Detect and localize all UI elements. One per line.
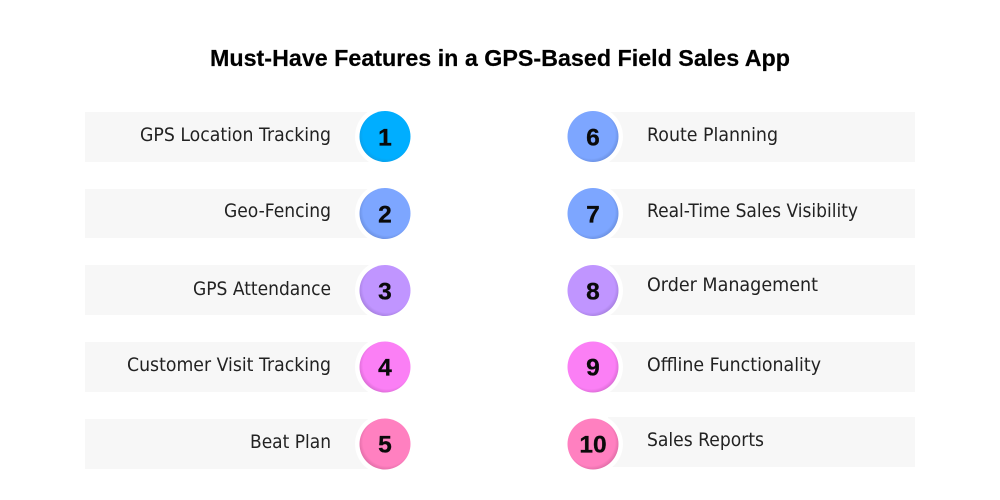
feature 10: Sales Reports: Sales Reports [647,429,764,451]
feature 2: Geo-Fencing: 2 [378,202,392,228]
feature 8: Order Management [563,260,915,320]
feature 2: Geo-Fencing: Geo-Fencing [224,200,331,222]
feature 2: Geo-Fencing [85,184,415,244]
feature 7: Real-Time Sales Visibility: Real-Time Sales Visibility [647,200,858,222]
feature 1: GPS Location Tracking [85,106,415,166]
feature 4: Customer Visit Tracking: 4 [378,354,392,382]
feature 8: Order Management: 8 [586,278,600,306]
feature 3: GPS Attendance: GPS Attendance [193,278,331,300]
feature 10: Sales Reports: 10 [579,432,607,458]
feature 4: Customer Visit Tracking [85,337,415,397]
feature 6: Route Planning [563,106,915,166]
feature 9: Offline Functionality: 9 [586,354,600,382]
feature 9: Offline Functionality: Offline Functionality [647,354,821,376]
feature 1: GPS Location Tracking: GPS Location Tracking [140,124,331,146]
feature 5: Beat Plan: Beat Plan [250,431,331,453]
feature 8: Order Management: Order Management [647,274,818,296]
feature 1: GPS Location Tracking: 1 [378,124,392,152]
feature 6: Route Planning: Route Planning [647,124,778,146]
feature 6: Route Planning: 6 [586,124,600,152]
feature 4: Customer Visit Tracking: Customer Visit Tracking [127,354,331,376]
feature 10: Sales Reports [563,414,915,474]
feature 5: Beat Plan: 5 [378,432,392,458]
title: Must-Have Features in a GPS-Based Field Sales App [210,45,790,71]
feature 9: Offline Functionality [563,337,915,397]
feature 3: GPS Attendance [85,260,415,320]
feature 7: Real-Time Sales Visibility [563,184,915,244]
feature 7: Real-Time Sales Visibility: 7 [586,202,600,228]
feature 3: GPS Attendance: 3 [378,278,392,306]
feature 5: Beat Plan [85,414,415,474]
